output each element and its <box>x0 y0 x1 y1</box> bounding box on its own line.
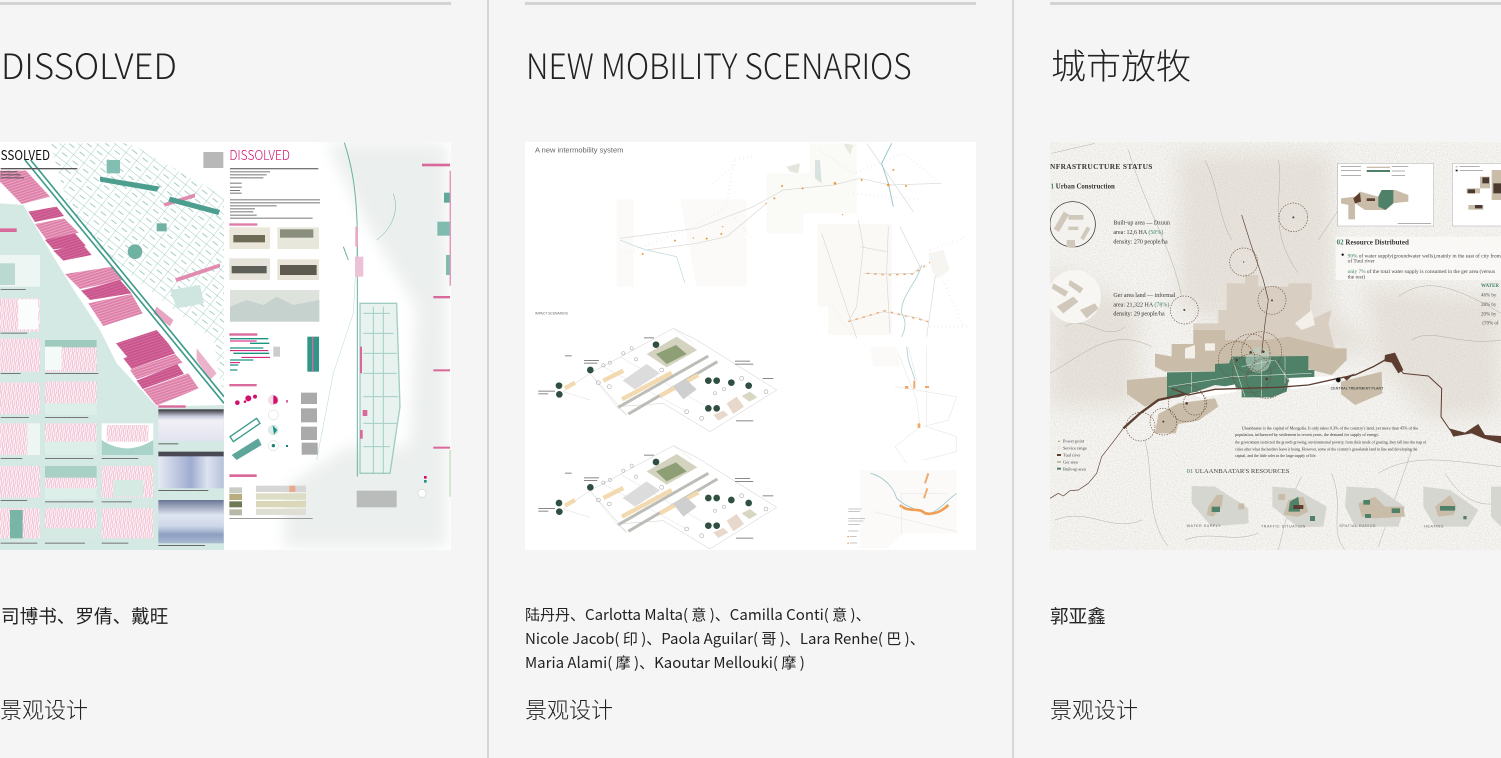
service points <box>1162 216 1294 423</box>
small map captions: HEATING <box>1424 525 1444 529</box>
poster intro text <box>230 168 320 219</box>
pink accents on site plan <box>355 227 367 439</box>
small map captions: TRAFFIC SITUATION <box>1261 524 1306 528</box>
map legend: Service range <box>1063 446 1087 451</box>
poster paper <box>1050 142 1501 550</box>
map: cropped fifth <box>1491 487 1501 527</box>
isometric diagram 1 <box>538 328 777 432</box>
resource bullet text: of Tuul river <box>1348 258 1375 265</box>
clearings inside tan area <box>1185 310 1315 358</box>
water stats: 20% by <box>1481 312 1497 317</box>
heading: urban construction: 1 Urban Construction <box>1051 183 1115 190</box>
teal site plan hatch <box>50 143 224 403</box>
resource bullet text: the rest) <box>1348 274 1365 281</box>
circle detail: ger area <box>1048 270 1101 323</box>
site plan linework <box>317 143 400 477</box>
authors: New Mobility Scenarios: Maria Alami( 摩 )、Kaoutar Mellouki( 摩 ) <box>525 652 805 673</box>
section label and line chart <box>229 333 319 372</box>
treatment plant marker <box>1331 378 1384 390</box>
white bank <box>100 315 163 357</box>
small description block <box>1 152 223 178</box>
watercolor sketches <box>229 223 319 322</box>
map: right middle corridor <box>870 347 957 463</box>
stats text: built-up: Built-up area — Dzuun <box>1113 221 1170 227</box>
authors: Urban Grazing: 郭亚鑫 <box>1050 602 1106 629</box>
site plan fill <box>360 303 400 473</box>
top rule column 1 <box>0 2 451 5</box>
small map captions: SPATIAL RADIUS <box>1339 524 1376 528</box>
panel: Dissolved poster <box>0 142 451 550</box>
isometric diagram 2 <box>538 446 777 549</box>
inset map: resource extent <box>1452 163 1501 226</box>
stats text: ger area: Ger area land — informal <box>1113 292 1176 299</box>
resource bullet text: only 7% of the total water supply is consumed in the ger area (versus <box>1348 268 1495 275</box>
Tuul river <box>1050 215 1450 498</box>
pink field strips <box>0 171 220 406</box>
water photos <box>158 405 224 546</box>
map legend <box>847 509 865 544</box>
authors: New Mobility Scenarios <box>525 604 925 673</box>
title: Dissolved: DISSOLVED <box>1 39 177 90</box>
stats text: built-up <box>1113 221 1170 245</box>
title: Urban Grazing: 城市放牧 <box>1051 39 1191 90</box>
left sheet paper <box>0 142 451 550</box>
small map captions <box>1187 524 1444 529</box>
heading: resource distributed: 02 Resource Distributed <box>1337 238 1409 246</box>
stats text: built-up: area: 12,6 HA (50%) <box>1113 229 1163 236</box>
resource panel backing <box>1336 237 1501 280</box>
sketch tiles <box>0 255 153 538</box>
outer poster margin <box>451 140 461 555</box>
water stats: (70% of <box>1482 322 1499 327</box>
river wash <box>0 203 224 551</box>
terrain grain <box>1050 142 1501 550</box>
small map captions: WATER SUPPLY <box>1187 524 1221 528</box>
urban extent: upper light tan <box>1193 275 1335 360</box>
map legend: Tuul river <box>1063 453 1081 458</box>
stats text: ger area: density: 29 people/ha <box>1113 312 1165 318</box>
color palette <box>229 474 313 519</box>
map legend: Power point <box>1063 438 1085 443</box>
map legend: Built-up area <box>1063 466 1086 471</box>
teal road <box>25 160 224 403</box>
poster subtitle: A new intermobility system <box>535 146 623 155</box>
top rule column 3 <box>1050 2 1501 5</box>
resource bullet text <box>1342 253 1501 281</box>
inset map: urban extent <box>1338 163 1434 226</box>
water stats <box>1481 284 1499 327</box>
top rule column 2 <box>525 2 976 5</box>
map: upper corridor <box>617 143 942 287</box>
column divider 1 <box>487 0 489 758</box>
poster label: cropped title: SSOLVED <box>1 145 50 164</box>
map: right lower city <box>860 470 957 548</box>
section heading: scenarios: IMPACT SCENARIOS <box>535 311 569 315</box>
circle detail: built-up area <box>1050 202 1095 247</box>
authors: New Mobility Scenarios: 陆丹丹、Carlotta Malta( 意 )、Camilla Conti( 意 )、 <box>525 604 871 625</box>
body paragraph: Ulaanbaatar is the capital of Mongolia. It only takes 0.3% of the country's land, yet more than 45% of the <box>1242 425 1418 431</box>
map: spatial services <box>1345 487 1405 527</box>
right side vertical strip charts <box>422 164 451 497</box>
water stats: 46% by <box>1481 294 1497 299</box>
map legend <box>1057 438 1087 471</box>
category: column 3: 景观设计 <box>1050 693 1138 725</box>
poster paper <box>525 142 976 550</box>
notes box and legend <box>357 476 427 507</box>
resource bullet text: 90% of water supply(groundwater wells),mainly in the east of city from <box>1348 253 1501 260</box>
right sheet <box>224 142 451 550</box>
small multiple maps <box>1192 486 1501 527</box>
column divider 2 <box>1012 0 1014 758</box>
water stats: 28% by <box>1481 303 1497 308</box>
authors: Dissolved: 司博书、罗倩、戴旺 <box>1 602 168 629</box>
panel: Urban Grazing poster <box>1050 142 1501 550</box>
grey-green map wash <box>283 143 447 547</box>
terrain tone <box>1050 153 1501 420</box>
map: right upper network <box>817 220 967 338</box>
heading: infrastructure status: NFRASTRUCTURE STATUS <box>1050 162 1152 171</box>
body paragraph: population, influenced by settlement in recent years, the demand for supply of energy. <box>1235 432 1379 438</box>
panel: New Mobility Scenarios poster <box>525 142 976 550</box>
map legend: Ger area <box>1063 459 1078 464</box>
map: traffic situation <box>1272 487 1327 527</box>
built-up green area <box>1167 356 1314 398</box>
teal building clusters <box>100 160 220 308</box>
body paragraph <box>1235 425 1427 459</box>
white river corridor <box>1188 376 1335 397</box>
radial diagrams <box>229 384 318 460</box>
map: water supply <box>1192 486 1248 527</box>
category: column 1: 景观设计 <box>0 693 88 725</box>
poster heading: DISSOLVED <box>229 145 290 164</box>
contour lines <box>1050 143 1501 550</box>
poster margins <box>1045 140 1050 555</box>
title: New Mobility Scenarios: NEW MOBILITY SCENARIOS <box>526 39 912 90</box>
map: fourth resource <box>1423 487 1478 527</box>
sketch captions <box>1 289 138 544</box>
heading: resources: 01 ULAANBAATAR'S RESOURCES <box>1187 468 1290 475</box>
stats text: built-up: density: 270 people/ha <box>1113 239 1168 245</box>
body paragraph: capital, and the little roles in the large supply of life. <box>1235 454 1316 459</box>
dashed service radius circles <box>1126 203 1308 441</box>
body paragraph: cities after what the herders leave it being. However, some of the country's grasslands land in line and developing the <box>1235 447 1418 452</box>
category: column 2: 景观设计 <box>525 693 613 725</box>
treatment plant marker: CENTRAL TREATMENT PLANT <box>1331 386 1384 390</box>
road lines on green <box>1168 357 1312 397</box>
stats text: ger area <box>1113 292 1176 318</box>
urban extent: tan <box>1127 330 1382 433</box>
authors: New Mobility Scenarios: Nicole Jacob( 印 )、Paola Aguilar( 哥 )、Lara Renhe( 巴 )、 <box>525 628 925 649</box>
body paragraph: the government restricted the growth growing, environmental poverty, from their mode of grazing, they fall into the trap of <box>1235 440 1427 445</box>
stats text: ger area: area: 21,322 HA (78%) <box>1113 301 1169 308</box>
water stats: WATER <box>1481 284 1499 289</box>
